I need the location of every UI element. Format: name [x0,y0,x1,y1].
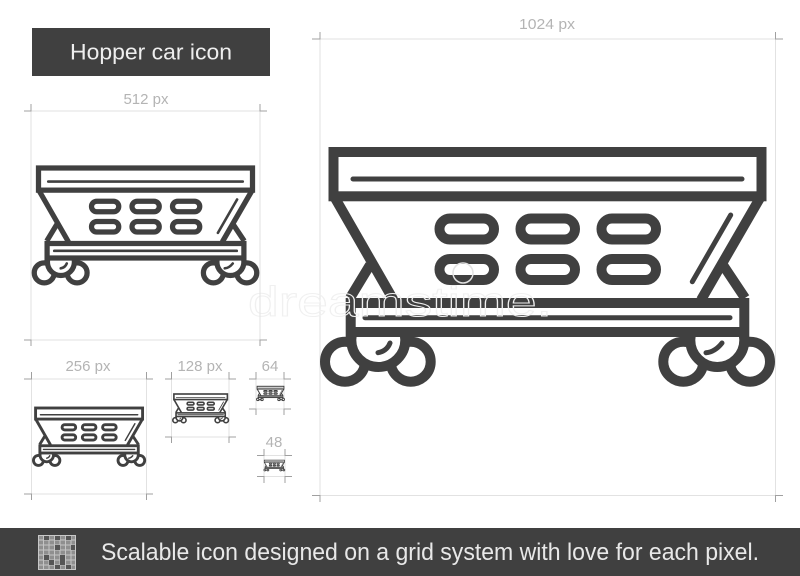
icon: hopper car large [325,152,770,382]
size frame: 512 px [31,111,267,346]
corner ticks: 64 px [249,372,291,415]
label: 1024 px: 1024 px [519,16,576,33]
footer text: Scalable icon designed on a grid system with love for each pixel. [101,539,759,566]
label: 64: 64 [262,358,278,375]
icon: hopper car 256 [33,408,145,465]
corner ticks: 128 px [165,372,236,443]
watermark: dreamstime. [248,278,552,325]
panel: 256 px icon [24,358,153,500]
panel: 1024 px icon [312,16,783,502]
title banner: Hopper car icon [70,40,232,64]
label: 48: 48 [266,434,282,451]
panel: 128 px icon [165,358,236,443]
corner ticks: 256 px [24,372,153,500]
panel: 512 px icon [24,91,267,346]
size frame: 64 px [256,379,291,415]
icon: hopper car 64 [257,386,284,401]
corner ticks: 48 px [257,449,292,483]
panel: 48 px icon [257,434,292,483]
icon: hopper car 512 [34,168,257,283]
label: 256 px: 256 px [65,358,111,375]
icon: hopper car 48 [264,460,285,471]
footer bar [0,528,800,576]
watermark [248,263,552,325]
size frame: 256 px [32,379,153,500]
title banner [32,28,270,76]
icon: pixel grid [38,535,76,570]
panel: 64 px icon [249,358,291,415]
label: 128 px: 128 px [177,358,223,375]
corner ticks: 512 px [24,104,267,346]
size frame: 48 px [264,456,292,483]
label: 512 px: 512 px [123,91,169,108]
corner ticks: 1024 px [312,32,783,502]
size frame: 128 px [172,379,236,443]
size frame: 1024 px [320,39,783,502]
icon: hopper car 128 [173,394,228,423]
